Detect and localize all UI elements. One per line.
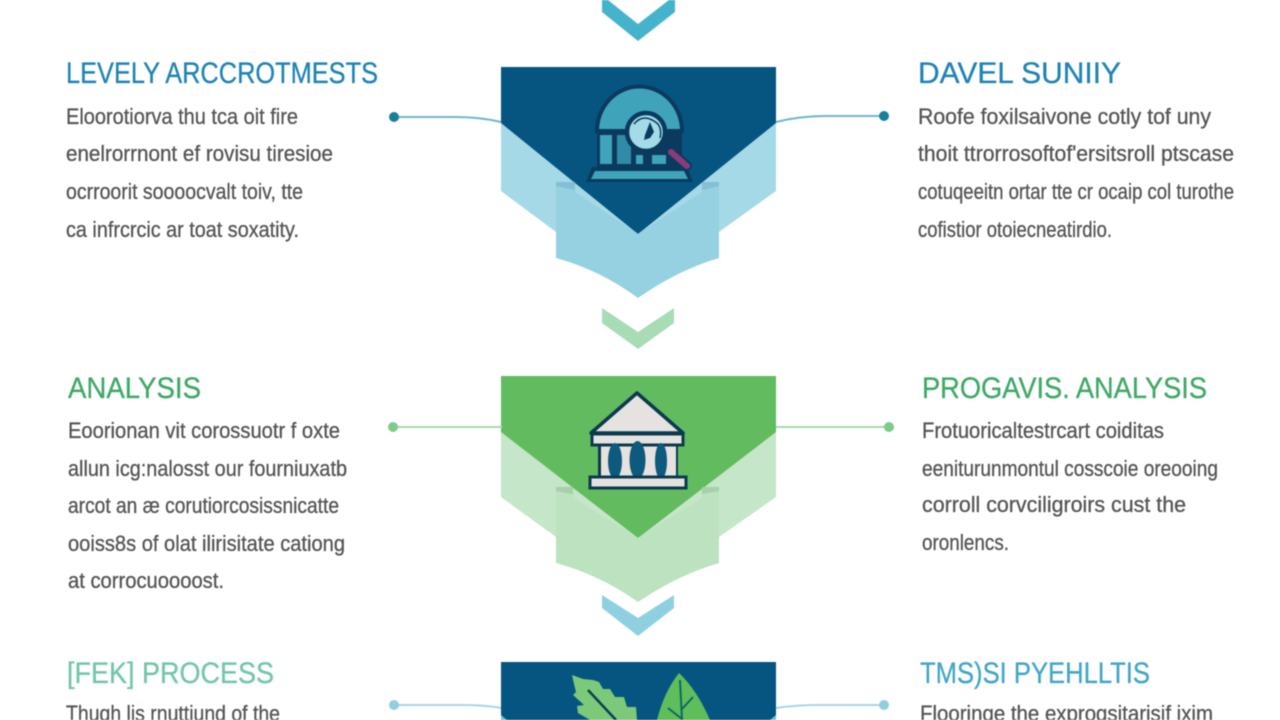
text block: row 2 right <box>922 372 1218 555</box>
connector: row 2 right <box>776 422 894 432</box>
body: row 2 left: Eoorionan vit corossuotr f oxte <box>68 418 340 443</box>
connector: row 2 left <box>388 422 501 432</box>
connector: row 1 right <box>776 111 889 122</box>
text block: row 2 left <box>68 372 347 593</box>
icon: classical building <box>590 393 686 488</box>
connector: row 1 left <box>389 112 501 122</box>
text block: row 3 right <box>920 657 1213 720</box>
body: row 2 right: oronlencs. <box>922 530 1009 555</box>
heading: row 2 left: ANALYSIS <box>68 372 201 405</box>
arrow: blue chevron <box>602 595 674 636</box>
body: row 1 right: cofistior otoiecneatirdio. <box>918 217 1112 242</box>
body: row 2 left: allun icg:nalosst our fourniuxatb <box>68 456 347 481</box>
body: row 2 left: at corrocuoooost. <box>68 568 224 593</box>
body: row 1 left: ocrroorit soooocvalt toiv, tte <box>66 179 303 204</box>
heading: row 2 right: PROGAVIS. ANALYSIS <box>922 372 1207 405</box>
heading: row 1 right: DAVEL SUNIIY <box>918 57 1121 90</box>
body: row 2 right <box>922 418 1218 555</box>
panel: step 2 shape <box>501 376 776 602</box>
heading: row 3 left: [FEK] PROCESS <box>67 657 274 690</box>
body: row 2 right: corroll corvciligroirs cust the <box>922 492 1186 517</box>
icon: leaves <box>572 673 710 720</box>
heading: row 1 left: LEVELY ARCCROTMESTS <box>66 57 378 90</box>
arrow: top chevron <box>602 0 675 41</box>
body: row 1 left: Eloorotiorva thu tca oit fire <box>66 104 298 129</box>
body: row 1 left: enelrorrnont ef rovisu tiresioe <box>66 141 333 166</box>
text block: row 1 left <box>66 57 378 242</box>
body: row 2 right: Frotuoricaltestrcart coiditas <box>922 418 1164 443</box>
text block: row 1 right <box>918 57 1234 242</box>
body: row 2 right: eeniturunmontul cosscoie oreooing <box>922 456 1218 481</box>
body: row 2 left: ooiss8s of olat ilirisitate cationg <box>68 531 345 556</box>
body: row 1 right <box>918 104 1234 242</box>
panel: step 1 shape <box>501 67 776 298</box>
text block: row 3 left <box>66 657 280 720</box>
connector: row 3 right <box>776 700 889 710</box>
body: row 2 left: arcot an æ corutiorcosissnicatte <box>68 493 339 518</box>
heading: row 3 right: TMS)SI PYEHLLTIS <box>920 657 1150 690</box>
arrow: green chevron <box>602 308 674 349</box>
icon: observatory with magnifier <box>586 86 693 182</box>
body: row 1 right: thoit ttrorrosoftof'ersitsroll ptscase <box>918 141 1234 166</box>
connector: row 3 left <box>389 700 501 710</box>
panel: step 3 shape <box>501 662 776 720</box>
body: row 1 left: ca infrcrcic ar toat soxatity. <box>66 217 299 242</box>
body: row 1 left <box>66 104 333 242</box>
body: row 2 left <box>68 418 347 593</box>
body: row 1 right: Roofe foxilsaivone cotly tof uny <box>918 104 1211 129</box>
